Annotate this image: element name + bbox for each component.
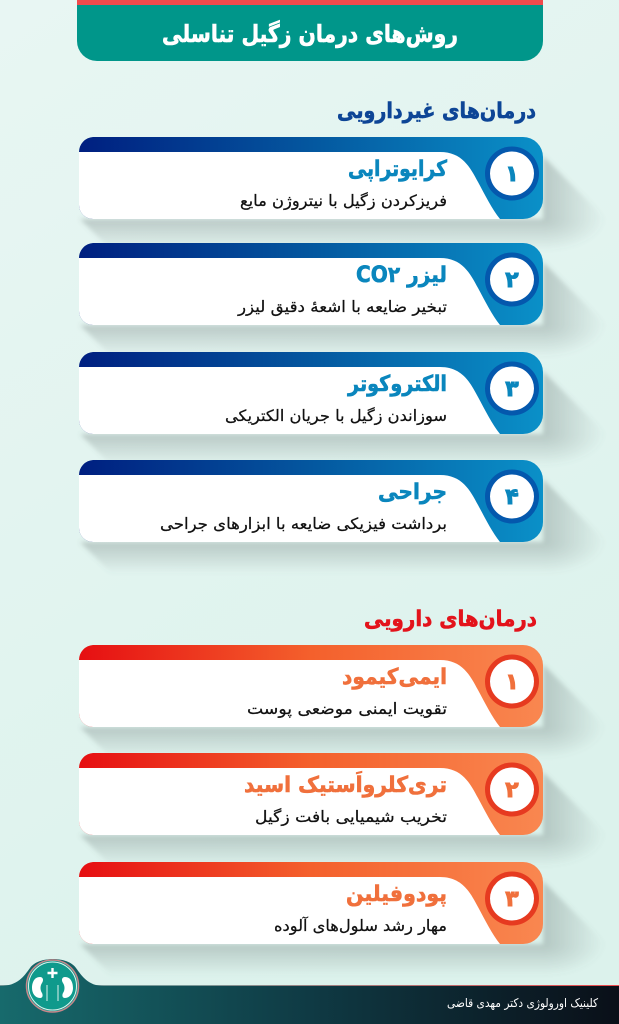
card 4: surgery [78, 460, 605, 574]
card 3: electrocautery [78, 352, 605, 466]
card 1: cryotherapy: ۱ [505, 162, 519, 187]
title banner: روش‌های درمان زگیل تناسلی [162, 20, 458, 48]
card 2: CO2 laser: ۲ [505, 268, 519, 293]
icon: clinic kidney logo [26, 960, 78, 1012]
card 6: trichloroacetic acid [78, 753, 605, 867]
heading: drug treatments: درمان‌های دارویی [364, 607, 537, 632]
card 2: CO2 laser: لیزر CO۲ [356, 263, 447, 288]
heading: non-drug treatments: درمان‌های غیردارویی [337, 99, 536, 124]
card 4: surgery: برداشت فیزیکی ضایعه با ابزارهای جراحی [160, 515, 447, 533]
card 6: trichloroacetic acid: ۲ [505, 778, 519, 803]
card 3: electrocautery: ۳ [505, 377, 519, 402]
card 1: cryotherapy [78, 137, 605, 251]
footer bar [0, 959, 619, 1024]
card 5: imiquimod: ایمی‌کیمود [342, 665, 447, 690]
card 5: imiquimod: ۱ [505, 670, 519, 695]
card 7: podophyllin: پودوفیلین [346, 882, 447, 907]
card 1: cryotherapy: کرایوتراپی [348, 157, 447, 182]
card 1: cryotherapy: فریزکردن زگیل با نیتروژن مایع [240, 192, 447, 211]
card 5: imiquimod: تقویت ایمنی موضعی پوست [247, 700, 447, 719]
card 5: imiquimod [78, 645, 605, 759]
title banner [77, 0, 543, 61]
card 7: podophyllin: ۳ [505, 887, 519, 912]
card 3: electrocautery: الکتروکوتر [347, 372, 447, 397]
card 4: surgery: جراحی [378, 480, 447, 505]
card 7: podophyllin: مهار رشد سلول‌های آلوده [274, 916, 447, 936]
card 6: trichloroacetic acid: تری‌کلرواَستیک اسید [244, 771, 447, 798]
footer clinic name: کلینیک اورولوژی دکتر مهدی قاضی [447, 996, 598, 1011]
card 2: CO2 laser: تبخیر ضایعه با اشعهٔ دقیق لیزر [237, 298, 447, 316]
card 7: podophyllin [78, 862, 605, 976]
card 3: electrocautery: سوزاندن زگیل با جریان الکتریکی [225, 407, 447, 425]
card 2: CO2 laser [78, 243, 605, 357]
card 4: surgery: ۴ [505, 485, 519, 510]
card 6: trichloroacetic acid: تخریب شیمیایی بافت زگیل [255, 808, 447, 826]
